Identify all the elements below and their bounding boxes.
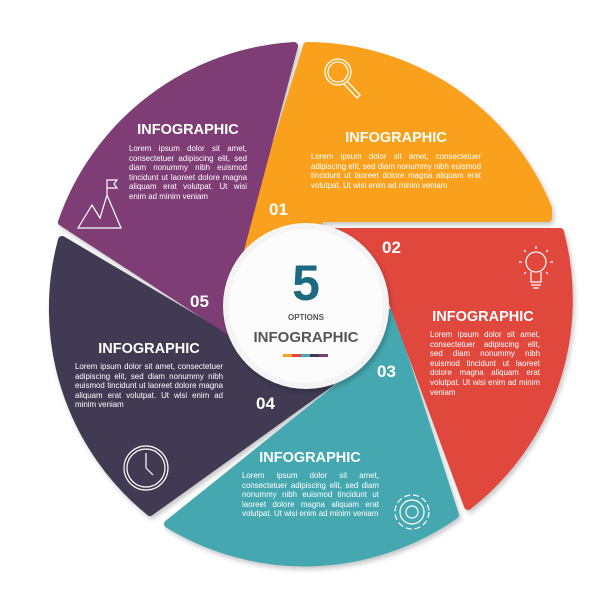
- center circle: [223, 223, 389, 389]
- body 05: Lorem ipsum dolor sit amet, consectetuer adipiscing elit, sed diam nonummy nibh euismod tincidunt ut laoreet dolore magna aliquam erat volutpat. Ut wisi enim ad minim veniam: [129, 144, 247, 201]
- number 04: 04: [256, 394, 275, 413]
- segment 01: yellow: [238, 46, 548, 300]
- number 03: 03: [377, 362, 396, 381]
- panel 01 title: INFOGRAPHIC: [345, 130, 447, 146]
- body 02: Lorem ipsum dolor sit amet, consectetuer adipiscing elit, sed diam nonummy nibh euismod tincidunt ut laoreet dolore magna aliquam erat volutpat. Ut wisi enim ad minim veniam: [430, 330, 540, 397]
- center circle: 5: [292, 255, 320, 311]
- segment 04: dark: [53, 240, 330, 512]
- segment 02: red: [306, 232, 569, 506]
- panel 05 title: INFOGRAPHIC: [137, 122, 239, 138]
- icon: mountain flag: [78, 180, 121, 228]
- center circle: OPTIONS: [288, 313, 325, 322]
- panel 03 title: INFOGRAPHIC: [259, 450, 361, 466]
- center circle: INFOGRAPHIC: [254, 329, 359, 346]
- panel 02 title: INFOGRAPHIC: [432, 309, 534, 325]
- icon: magnifier: [325, 59, 360, 98]
- body 03: Lorem ipsum dolor sit amet, consectetuer adipiscing elit, sed diam nonummy nibh euismod tincidunt ut laoreet dolore magna aliquam erat volutpat. Ut wisi enim ad minim veniam: [242, 471, 379, 518]
- panel 04 title: INFOGRAPHIC: [98, 341, 200, 357]
- segment 05: purple: [62, 46, 306, 338]
- segment 03: teal: [168, 306, 455, 562]
- icon: gear: [395, 495, 429, 529]
- body 04: Lorem ipsum dolor sit amet, consectetuer adipiscing elit, sed diam nonummy nibh euismod tincidunt ut laoreet dolore magna aliquam erat volutpat. Ut wisi enim ad minim veniam: [75, 362, 223, 409]
- body 01: Lorem ipsum dolor sit amet, consectetuer adipiscing elit, sed diam nonummy nibh euismod tincidunt ut laoreet dolore magna aliquam erat volutpat. Ut wisi enim ad minim veniam: [311, 152, 481, 190]
- number 01: 01: [269, 200, 288, 219]
- icon: lightbulb: [519, 246, 553, 288]
- icon: clock: [124, 446, 168, 490]
- number 05: 05: [190, 292, 209, 311]
- number 02: 02: [382, 238, 401, 257]
